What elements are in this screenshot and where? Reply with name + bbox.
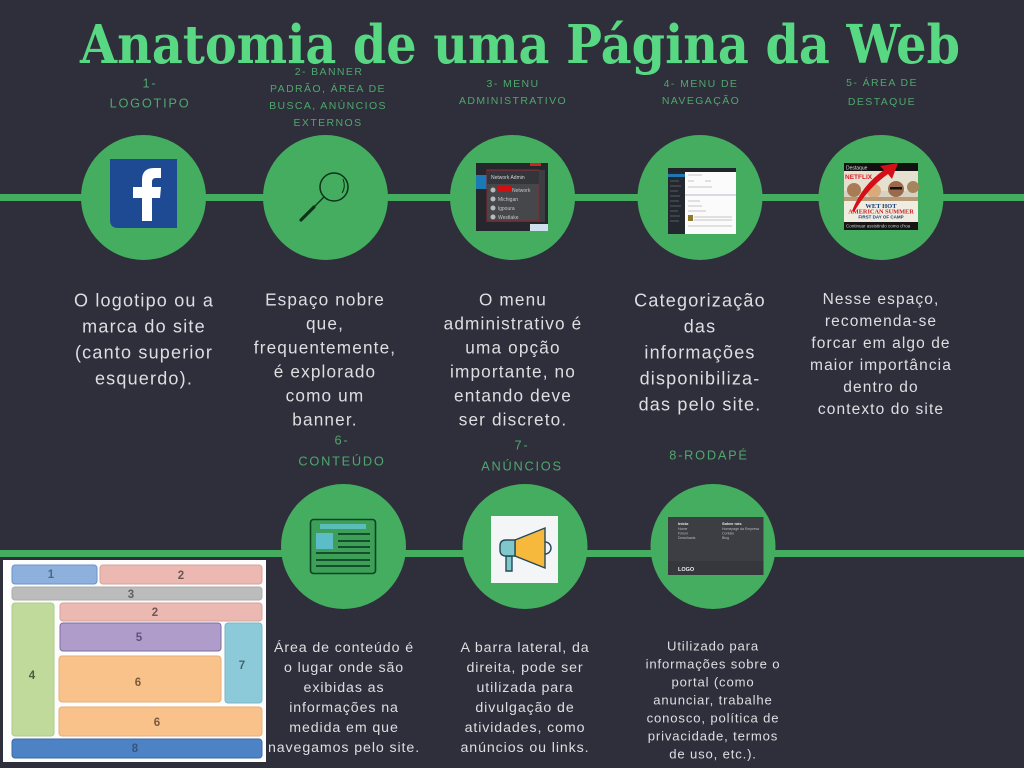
text: uma opção [465, 338, 561, 358]
image: footer screenshot: Home [678, 527, 687, 531]
block 4 navigation: 4 [29, 670, 36, 682]
text: dentro do [843, 379, 919, 396]
text: EXTERNOS [294, 117, 362, 129]
label 5 [846, 77, 918, 108]
block 2 secondary banner: 2 [152, 607, 158, 619]
text: Área de conteúdo é [274, 640, 414, 656]
text: 3- MENU [487, 78, 539, 90]
label 4 [662, 78, 740, 107]
text: portal (como [672, 674, 754, 690]
timeline row 2 [0, 550, 1024, 557]
text: maior importância [810, 357, 952, 374]
icon: newspaper [310, 520, 376, 574]
image: highlighted movie banner: Destaque [846, 166, 868, 172]
block 5 highlight [60, 623, 221, 651]
text: Nesse espaço, [823, 291, 939, 308]
image: highlighted movie banner: NETFLIX [845, 174, 873, 181]
image: admin menu screenshot: Westlake [498, 215, 519, 221]
block 2 banner: 2 [178, 570, 184, 582]
image: admin menu screenshot: lgpoura [498, 206, 515, 212]
text: recomenda-se [825, 313, 937, 330]
block 8 footer [12, 739, 262, 758]
image: footer screenshot: Blog [722, 536, 729, 540]
wireframe diagram of page layout [3, 560, 266, 762]
image: footer screenshot [668, 517, 764, 575]
block 4 navigation [12, 603, 54, 736]
text: Espaço nobre [265, 290, 385, 310]
text: O menu [479, 290, 547, 310]
text: anuncios [460, 640, 590, 756]
timeline row 1 [0, 194, 1024, 201]
block 6 content: 6 [135, 677, 141, 689]
text: menu administrativo [444, 290, 582, 430]
text: 8-RODAPÉ [669, 448, 749, 462]
text: ser discreto. [459, 410, 567, 430]
text: 4- MENU DE [664, 78, 738, 90]
text: disponibiliza- [640, 368, 760, 388]
text: conosco, política de [647, 710, 779, 726]
text: (canto superior [75, 342, 213, 362]
block 1 logo: 1 [48, 569, 55, 581]
text: informações na [289, 700, 399, 716]
text: entando deve [454, 386, 572, 406]
circle: menu de navegacao [638, 135, 762, 260]
text: exibidas as [304, 680, 384, 696]
text: contexto do site [818, 401, 944, 418]
text: PADRÃO, ÁREA DE [270, 83, 386, 95]
text: forcar em algo de [811, 335, 951, 352]
label 7 [481, 438, 563, 474]
icon: megaphone [491, 516, 558, 583]
text: anunciar, trabalhe [653, 692, 773, 708]
block 2 secondary banner [60, 603, 262, 621]
block 8 footer: 8 [132, 743, 139, 755]
block 6 content [59, 656, 221, 702]
text: menu de navegacao [634, 290, 766, 414]
text: Categorização [634, 290, 766, 310]
text: das [684, 316, 716, 336]
text: informações sobre o [646, 656, 780, 672]
circle: rodape [650, 484, 776, 609]
block 6 content lower: 6 [154, 717, 160, 729]
text: das pelo site. [639, 394, 761, 414]
image: navigation menu screenshot [668, 168, 736, 234]
text: medida em que [289, 720, 399, 736]
label 2 [269, 66, 387, 129]
image: highlighted movie banner: Continuar assistindo como d'roa [846, 224, 911, 228]
text: direita, pode ser [466, 660, 584, 676]
text: anúncios ou links. [461, 740, 589, 756]
label 6 [298, 432, 386, 468]
label 3 [459, 78, 567, 107]
text: importante, no [450, 362, 576, 382]
text: marca do site [82, 316, 206, 336]
text: banner. [292, 410, 358, 430]
circle: logotipo [81, 135, 206, 260]
block 3 admin menu [12, 587, 262, 601]
title: Anatomia de uma Página da Web [80, 14, 960, 76]
circle: anuncios [462, 484, 588, 609]
text: ANÚNCIOS [481, 458, 563, 474]
text: utilizada para [476, 680, 574, 696]
block 3 admin menu: 3 [128, 589, 134, 601]
circle: menu administrativo [450, 135, 575, 260]
text: frequentemente, [254, 338, 396, 358]
circle: area de destaque [818, 135, 944, 260]
block 1 logo [12, 565, 97, 584]
image: highlighted movie banner: FIRST DAY OF CAMP [858, 214, 904, 220]
text: A barra lateral, da [460, 640, 590, 656]
icon: magnifying glass [301, 173, 348, 220]
image: footer screenshot: Contato [722, 532, 734, 536]
block 7 ads: 7 [239, 660, 245, 672]
text: logotipo [74, 290, 214, 388]
text: 5- ÁREA DE [846, 77, 918, 89]
text: Utilizado para [667, 638, 759, 654]
text: privacidade, termos [648, 728, 778, 744]
text: 6- [335, 432, 349, 448]
text: esquerdo). [95, 368, 193, 388]
text: atividades, como [465, 720, 585, 736]
text: BUSCA, ANÚNCIOS [269, 100, 387, 112]
text: DESTAQUE [848, 96, 916, 108]
text: como um [286, 386, 364, 406]
image: footer screenshot: LOGO [678, 567, 695, 573]
image: footer screenshot: Fórum [678, 532, 688, 536]
label 1 [110, 76, 190, 110]
image: highlighted movie banner: WET HOT [865, 203, 897, 210]
block 5 highlight: 5 [136, 632, 143, 644]
image: footer screenshot: Downloads [678, 536, 696, 540]
image: admin menu screenshot [476, 163, 548, 231]
text: NAVEGAÇÃO [662, 95, 740, 107]
image: footer screenshot: Sobre nós [722, 521, 742, 526]
text: 7- [515, 438, 529, 452]
text: divulgação de [475, 700, 575, 716]
text: o lugar onde são [284, 660, 404, 676]
text: LOGOTIPO [110, 96, 190, 110]
text: CONTEÚDO [298, 454, 386, 468]
circle: conteudo [281, 484, 406, 609]
text: area de destaque [810, 291, 952, 418]
text: conteudo [268, 640, 420, 756]
image: highlighted movie banner [844, 163, 919, 230]
image: admin menu screenshot: Network Admin [491, 175, 525, 181]
text: administrativo é [444, 314, 582, 334]
block 7 ads [225, 623, 262, 703]
text: navegamos pelo site. [268, 740, 420, 756]
text: rodape [646, 638, 780, 762]
block 6 content lower [59, 707, 262, 736]
text: é explorado [274, 362, 376, 382]
image: admin menu screenshot: Network [512, 188, 531, 194]
circle: banner [263, 135, 388, 260]
text: 2- BANNER [295, 66, 363, 78]
image: footer screenshot: Início [678, 521, 689, 526]
image: footer screenshot: Homepage da Empresa [722, 527, 759, 531]
text: O logotipo ou a [74, 290, 214, 310]
text: de uso, etc.). [669, 746, 757, 762]
icon: facebook logo [110, 159, 177, 228]
text: informações [644, 342, 756, 362]
text: que, [306, 314, 344, 334]
text: ADMINISTRATIVO [459, 95, 567, 107]
image: highlighted movie banner: AMERICAN SUMMER [848, 208, 914, 216]
text: 1- [143, 76, 157, 90]
block 2 banner [100, 565, 262, 584]
text: banner [254, 290, 396, 430]
image: admin menu screenshot: Michigan [498, 197, 518, 203]
